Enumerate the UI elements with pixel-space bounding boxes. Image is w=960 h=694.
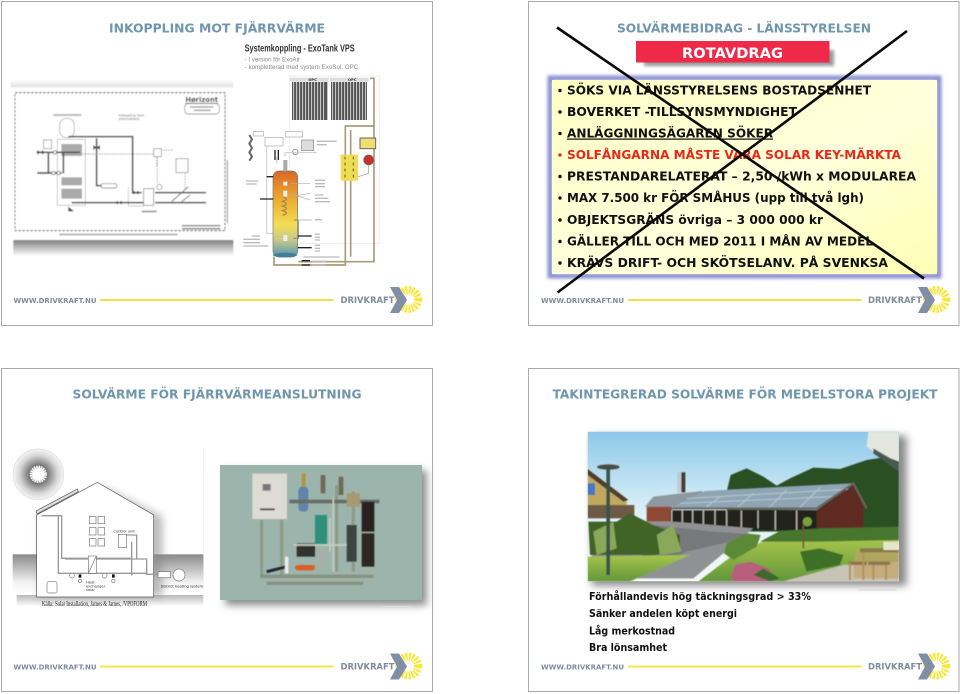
yellow list box: PRESTANDARELATERAT – 2,50 /kWh x MODULAREA [567, 170, 917, 184]
yellow list box [550, 78, 939, 276]
yellow list box: ANLÄGGNINGSÄGAREN SÖKER [567, 126, 774, 140]
footer [541, 287, 946, 313]
footer [541, 654, 946, 680]
title: inkoppling: INKOPPLING MOT FJÄRRVÄRME [109, 20, 325, 35]
footer: DRIVKRAFT [340, 662, 395, 672]
diagram: ExoTank VPS system: - I version för ExoAir [245, 57, 300, 63]
diagram: ExoTank VPS system: Systemkoppling - ExoTank VPS [245, 44, 355, 55]
yellow list box: MAX 7.500 kr FÖR SMÅHUS (upp till två lgh) [567, 190, 864, 205]
diagram: house with solar system: Heat [86, 581, 95, 585]
diagram: Horizont plumbing schematic: Hørizont [185, 95, 218, 104]
list: benefits: Bra lönsamhet [589, 641, 667, 654]
yellow list box: KRÄVS DRIFT- OCH SKÖTSELANV. PÅ SVENKSA [567, 255, 889, 270]
footer: WWW.DRIVKRAFT.NU [14, 296, 96, 305]
diagram: house with solar system: District heating system [161, 585, 204, 589]
panel: solvärme för fjärrvärmeanslutning [2, 368, 432, 692]
photo: solar roof building [588, 432, 907, 591]
list: benefits: Förhållandevis hög täckningsgrad > 33% [589, 590, 811, 603]
title: takintegrerad: TAKINTEGRERAD SOLVÄRME FÖR MEDELSTORA PROJEKT [552, 386, 938, 401]
yellow list box: SOLFÅNGARNA MÅSTE VARA SOLAR KEY-MÄRKTA [567, 147, 902, 162]
list: benefits: Sänker andelen köpt energi [589, 607, 737, 620]
yellow list box: BOVERKET -TILLSYNSMYNDIGHET [567, 105, 798, 119]
crossing-out X [557, 28, 924, 292]
footer: DRIVKRAFT [868, 662, 922, 672]
footer: WWW.DRIVKRAFT.NU [541, 296, 624, 305]
panel: takintegrerad solvärme [528, 368, 959, 692]
photo: district heating substation unit [220, 465, 427, 608]
sun [13, 449, 64, 500]
diagram: house with solar system: exchanger [86, 584, 106, 588]
footer: WWW.DRIVKRAFT.NU [14, 662, 96, 672]
panel: inkoppling mot fjärrvärme [2, 2, 432, 326]
hot water tank [273, 171, 298, 257]
red rotavdrag banner: ROTAVDRAG [682, 46, 783, 62]
title: solvärmebidrag: SOLVÄRMEBIDRAG - LÄNSSTYRELSEN [617, 20, 871, 35]
yellow list box: GÄLLER TILL OCH MED 2011 I MÅN AV MEDEL [567, 234, 873, 248]
diagram: Horizont plumbing schematic: Inkoppling över [119, 113, 145, 117]
footer: WWW.DRIVKRAFT.NU [541, 662, 624, 672]
diagram: ExoTank VPS system [243, 44, 379, 265]
solar collectors [290, 78, 369, 120]
diagram: ExoTank VPS system: - kompletterad med system ExoSol, OPC. [245, 65, 360, 71]
solar collectors: OPC [308, 78, 317, 82]
diagram: house with solar system [13, 448, 204, 606]
list: benefits: Låg merkostnad [589, 624, 675, 638]
diagram: Horizont plumbing schematic: ystemdelare [119, 117, 139, 121]
bullets [558, 89, 562, 265]
diagram: house with solar system: solar [86, 588, 95, 592]
footer: DRIVKRAFT [868, 296, 922, 306]
solar collectors: OPC [348, 78, 357, 82]
panel: solvärmebidrag [528, 2, 959, 326]
footer: DRIVKRAFT [340, 296, 395, 306]
red rotavdrag banner [636, 41, 834, 66]
diagram: house with solar system: Control unit [113, 529, 135, 533]
list: benefits [589, 590, 811, 654]
yellow controller [341, 155, 358, 181]
yellow list box: OBJEKTSGRÄNS övriga – 3 000 000 kr [567, 212, 823, 227]
title: fjärrvärmeanslutning: SOLVÄRME FÖR FJÄRRVÄRMEANSLUTNING [72, 386, 362, 401]
source caption: Källa: Solar Installation, James & James, /VPOFORM [42, 599, 147, 608]
diagram: Horizont plumbing schematic [11, 80, 233, 256]
footer [14, 654, 418, 680]
yellow list box: SÖKS VIA LÄNSSTYRELSENS BOSTADSENHET [567, 82, 872, 98]
footer [14, 287, 418, 313]
